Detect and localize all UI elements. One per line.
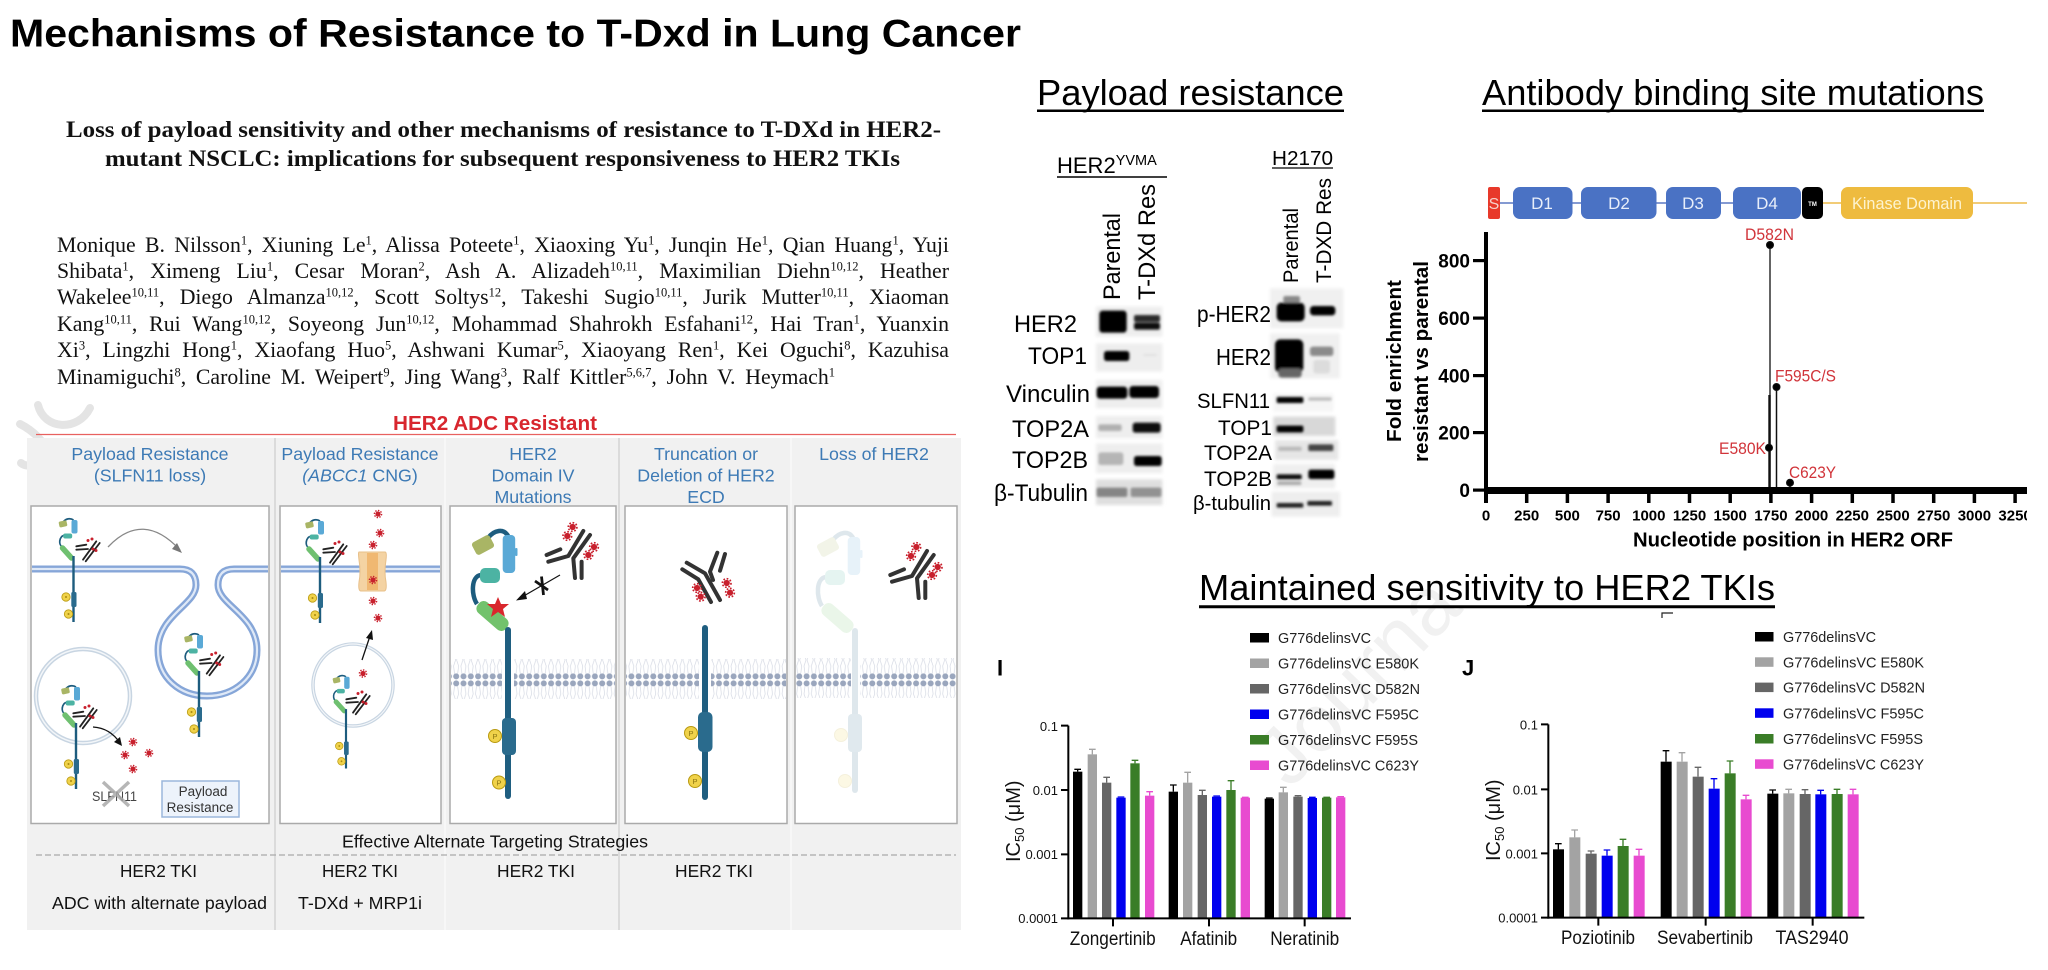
paper title: Loss of payload sensitivity and other mechanisms of resistance to T-DXd in HER2- [66, 117, 941, 143]
column headers: Loss of HER2 [819, 444, 929, 464]
western blot: HER2 YVMA: Parental [1099, 213, 1126, 300]
blot labels: SLFN11 [1197, 390, 1270, 413]
y tick labels: 0.01 [1033, 783, 1058, 798]
alternate strategies by column: T-DXd + MRP1i [298, 893, 422, 913]
illustration: truncation or deletion of ECD: P [688, 729, 694, 738]
alternate strategies by column: HER2 TKI [322, 861, 398, 881]
x tick labels: 1750 [1754, 508, 1788, 524]
alternate strategies by column: HER2 TKI [675, 861, 753, 881]
western blot: H2170: T-DXD Res [1313, 178, 1336, 283]
legend: G776delinsVC E580K [1278, 656, 1419, 672]
SLFN11 crossed out [92, 782, 137, 806]
paper title: mutant NSCLC: implications for subsequent responsiveness to HER2 TKIs [105, 146, 900, 172]
lollipop chart: Fold enrichment [1384, 280, 1406, 442]
legend: G776delinsVC F595C [1783, 705, 1924, 722]
text: Kang10,11, Rui Wang10,12, Soyeong Jun10,12, Mohammad Shahrokh Esfahani12, Hai Tran1, Yuanxin [57, 312, 949, 336]
illustration: truncation or deletion of ECD [626, 553, 786, 797]
western blot: H2170 [1193, 148, 1343, 517]
legend: G776delinsVC E580K [1783, 654, 1924, 671]
x labels: Poziotinib [1561, 928, 1635, 949]
legend: G776delinsVC C623Y [1278, 758, 1419, 774]
axis titles: Nucleotide position in HER2 ORF [1633, 530, 1953, 552]
blot labels: TOP2A [1012, 416, 1089, 443]
legend: G776delinsVC [1278, 630, 1371, 647]
column headers: (ABCC1 CNG) [302, 466, 418, 486]
alternate strategies by column: ADC with alternate payload [52, 893, 267, 913]
blot labels: HER2 [1216, 344, 1271, 370]
x tick labels: 750 [1596, 508, 1621, 524]
mutation labels [1719, 226, 1836, 482]
x labels: TAS2940 [1776, 928, 1848, 949]
x tick labels: 1000 [1632, 508, 1665, 524]
axes [1473, 232, 2027, 503]
y tick labels: 0 [1459, 481, 1470, 502]
y axis title: 50 [1492, 827, 1507, 841]
mutation labels: E580K [1719, 440, 1766, 458]
watermark: top left of mechanism panel [20, 405, 90, 465]
blot header: H2170 [1272, 148, 1333, 170]
illustration: HER2 domain IV mutations: P [496, 778, 502, 788]
alternate strategies by column: HER2 TKI [120, 861, 197, 881]
blot labels: p-HER2 [1197, 301, 1271, 327]
alternate strategies by column: HER2 TKI [497, 861, 575, 881]
x tick labels: 2750 [1917, 508, 1950, 524]
y axis title: (μM) [1003, 780, 1025, 828]
x labels: Sevabertinib [1657, 928, 1753, 949]
blot header: HER2 [1057, 153, 1116, 178]
column headers: ECD [687, 487, 725, 507]
lollipops [1766, 242, 1794, 490]
heading: maintained sensitivity: Maintained sensitivity to HER2 TKIs [1199, 567, 1775, 608]
legend: G776delinsVC F595S [1278, 732, 1418, 749]
paper title [66, 117, 941, 172]
x tick labels: 3000 [1958, 508, 1991, 524]
x tick labels: 1250 [1673, 508, 1706, 524]
panel letter: I [997, 656, 1003, 681]
illustration: HER2 domain IV mutations: P [492, 732, 498, 741]
legend [1250, 630, 1420, 774]
legend: G776delinsVC D582N [1278, 681, 1420, 698]
column headers: Payload Resistance [281, 444, 439, 464]
illustration: truncation or deletion of ECD: P [692, 777, 698, 786]
legend: G776delinsVC C623Y [1783, 756, 1924, 773]
blot labels [994, 311, 1090, 507]
column headers: (SLFN11 loss) [94, 466, 206, 486]
watermark: journal: Journa [1237, 559, 1477, 803]
y tick labels: 0.01 [1513, 782, 1538, 798]
blot labels: β-tubulin [1193, 493, 1271, 515]
boxes [31, 506, 957, 824]
column headers: Mutations [494, 487, 572, 507]
x tick labels: 3250 [1998, 508, 2032, 524]
y axis title: (μM) [1483, 779, 1505, 827]
y tick labels: 0.1 [1520, 718, 1538, 732]
HER2 domain diagram: D1 [1531, 194, 1553, 213]
x labels: Neratinib [1270, 929, 1339, 950]
x tick labels: 1500 [1714, 508, 1747, 524]
y tick labels [1498, 718, 1538, 926]
HER2 domain diagram: D4 [1756, 194, 1778, 213]
y tick labels: 800 [1438, 252, 1470, 272]
y tick labels: 0.0001 [1018, 911, 1058, 926]
x labels: Afatinib [1180, 929, 1237, 950]
panel heading: HER2 ADC Resistant [393, 413, 597, 435]
blot labels [1193, 301, 1272, 515]
x tick labels: 2000 [1795, 508, 1828, 524]
column headers: HER2 [509, 444, 557, 464]
illustration: loss of HER2 [796, 533, 956, 790]
blot labels: TOP2B [1012, 447, 1088, 474]
x labels [1561, 928, 1848, 949]
illustration: SLFN11 loss [32, 519, 268, 817]
illustration: HER2 domain IV mutations [451, 523, 615, 796]
payload resistance label: Payload [179, 784, 227, 799]
x tick labels [1482, 510, 2027, 520]
HER2 domain diagram: S [1489, 196, 1499, 213]
y axis title: 50 [1012, 828, 1027, 842]
HER2 domain diagram: D2 [1608, 194, 1630, 213]
payload resistance label [162, 781, 239, 817]
HER2 domain diagram: Kinase Domain [1852, 195, 1962, 213]
blot labels: HER2 [1014, 311, 1077, 338]
author list [57, 233, 949, 389]
legend: G776delinsVC [1783, 629, 1876, 646]
y tick labels: 0.001 [1505, 846, 1538, 862]
blot labels: Vinculin [1006, 381, 1090, 408]
HER2 domain diagram [1488, 187, 2027, 219]
legend: G776delinsVC F595C [1278, 706, 1419, 724]
text: Shibata1, Ximeng Liu1, Cesar Moran2, Ash A. Alizadeh10,11, Maximilian Diehn10,12, Heather [57, 259, 949, 283]
column headers: Truncation or [654, 444, 758, 464]
y tick labels: 0.001 [1025, 847, 1058, 862]
lollipop chart [1384, 226, 2032, 552]
y tick labels: 0.0001 [1498, 910, 1538, 926]
bar chart J [1462, 629, 1925, 949]
y tick labels: 200 [1438, 424, 1470, 444]
y tick labels [1018, 719, 1058, 926]
y axis title: IC [1003, 842, 1025, 862]
blot bands [1270, 288, 1343, 517]
panel background [27, 438, 961, 930]
alternate strategies by column [52, 861, 753, 913]
bar chart I [997, 630, 1420, 950]
western blot: H2170: Parental [1280, 208, 1303, 283]
axes [1061, 726, 1351, 926]
blot labels: β-Tubulin [994, 480, 1088, 507]
column headers [71, 444, 929, 507]
blot header: YVMA [1116, 153, 1157, 169]
text: Minamiguchi8, Caroline M. Weipert9, Jing Wang3, Ralf Kittler5,6,7, John V. Heymach1 [57, 365, 835, 389]
illustration: ABCC1 CNG [281, 510, 440, 768]
blot labels: TOP1 [1218, 417, 1272, 440]
x tick labels: 0 [1482, 508, 1490, 524]
axes [1541, 724, 1864, 926]
mutation labels: F595C/S [1775, 368, 1836, 386]
column headers: Deletion of HER2 [637, 466, 775, 486]
blot labels: TOP1 [1028, 343, 1087, 370]
title: Mechanisms of Resistance to T-Dxd in Lung Cancer [10, 12, 1021, 56]
legend: G776delinsVC D582N [1783, 680, 1925, 697]
lollipop chart: resistant vs parental [1411, 261, 1433, 462]
x tick labels: 2500 [1876, 508, 1910, 524]
blot labels: TOP2A [1204, 442, 1272, 465]
y tick labels [1438, 252, 1470, 502]
heading: antibody binding site mutations: Antibody binding site mutations [1482, 72, 1984, 113]
panel letter: J [1462, 656, 1474, 681]
blot bands [1096, 307, 1162, 505]
bars [1541, 724, 1864, 926]
bars [1061, 726, 1351, 926]
mutation labels: C623Y [1789, 464, 1836, 482]
payload resistance label: Resistance [167, 800, 233, 815]
HER2 domain diagram: D3 [1682, 194, 1704, 213]
legend [1755, 629, 1925, 773]
y tick labels: 400 [1438, 366, 1470, 388]
panel: HER2 ADC resistant mechanisms [27, 413, 961, 930]
text: Monique B. Nilsson1, Xiuning Le1, Alissa Poteete1, Xiaoxing Yu1, Junqin He1, Qian Huang1, Yuji [57, 233, 949, 257]
x tick labels: 250 [1514, 508, 1539, 524]
blot labels: TOP2B [1204, 468, 1272, 491]
y axis title: IC [1483, 841, 1505, 861]
column headers: Domain IV [491, 466, 575, 486]
mutation labels: D582N [1745, 226, 1794, 244]
text: Xi3, Lingzhi Hong1, Xiaofang Huo5, Ashwani Kumar5, Xiaoyang Ren1, Kei Oguchi8, Kazuhisa [57, 338, 949, 362]
heading: payload resistance: Payload resistance [1037, 72, 1344, 113]
y tick labels: 600 [1438, 309, 1470, 330]
HER2 domain diagram: TM [1808, 202, 1817, 208]
SLFN11 crossed out: SLFN11 [92, 788, 137, 804]
text: Wakelee10,11, Diego Almanza10,12, Scott Soltys12, Takeshi Sugio10,11, Jurik Mutter10,11, Xiaoman [57, 285, 949, 309]
western blot: HER2 YVMA [994, 153, 1167, 507]
legend: G776delinsVC F595S [1783, 731, 1923, 748]
y tick labels: 0.1 [1040, 719, 1058, 734]
x tick labels: 500 [1555, 508, 1580, 524]
x labels: Zongertinib [1070, 929, 1156, 950]
western blot: HER2 YVMA: T-DXd Res [1134, 184, 1161, 300]
x labels [1070, 929, 1339, 950]
alternate strategies heading: Effective Alternate Targeting Strategies [342, 832, 648, 852]
x tick labels: 2250 [1836, 508, 1869, 524]
column headers: Payload Resistance [71, 444, 229, 464]
